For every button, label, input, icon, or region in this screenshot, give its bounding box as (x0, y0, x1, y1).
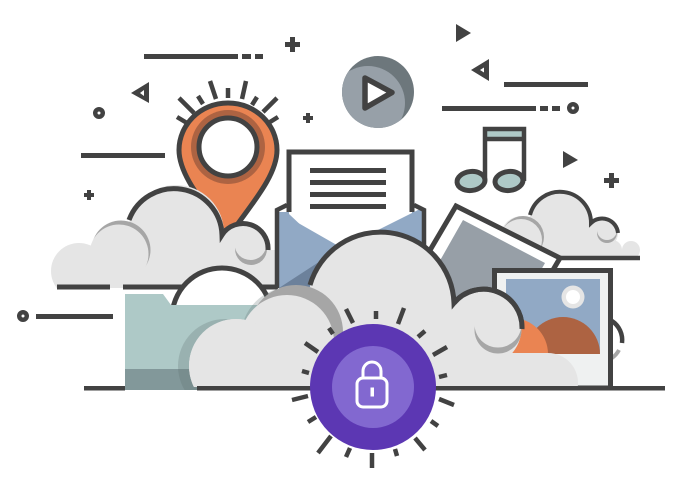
letter text lines (310, 168, 386, 209)
icon: triangles (131, 24, 578, 168)
sun (562, 286, 584, 308)
badge rays (292, 308, 454, 468)
top-right cloud (500, 192, 640, 261)
location pin (177, 81, 278, 238)
lock badge (292, 308, 454, 468)
icon: music notes (456, 129, 524, 192)
icon: padlock (357, 362, 387, 407)
hills (512, 317, 600, 354)
icon: plus marks (84, 37, 619, 200)
icon: ring dots (19, 104, 577, 320)
small arc behind front photo (612, 321, 622, 358)
ground line left (84, 386, 125, 390)
front cloud (189, 230, 578, 387)
left cloud (51, 185, 279, 299)
folder (125, 268, 300, 390)
icon: play button (342, 56, 414, 128)
front photo (492, 268, 613, 386)
folder shadows (178, 290, 276, 390)
envelope (277, 152, 424, 302)
pin body (179, 103, 277, 238)
decorative lines and small marks (36, 54, 588, 319)
pin rays (177, 81, 278, 123)
ground line (197, 386, 665, 390)
letter (289, 152, 412, 262)
back photo (396, 206, 560, 360)
